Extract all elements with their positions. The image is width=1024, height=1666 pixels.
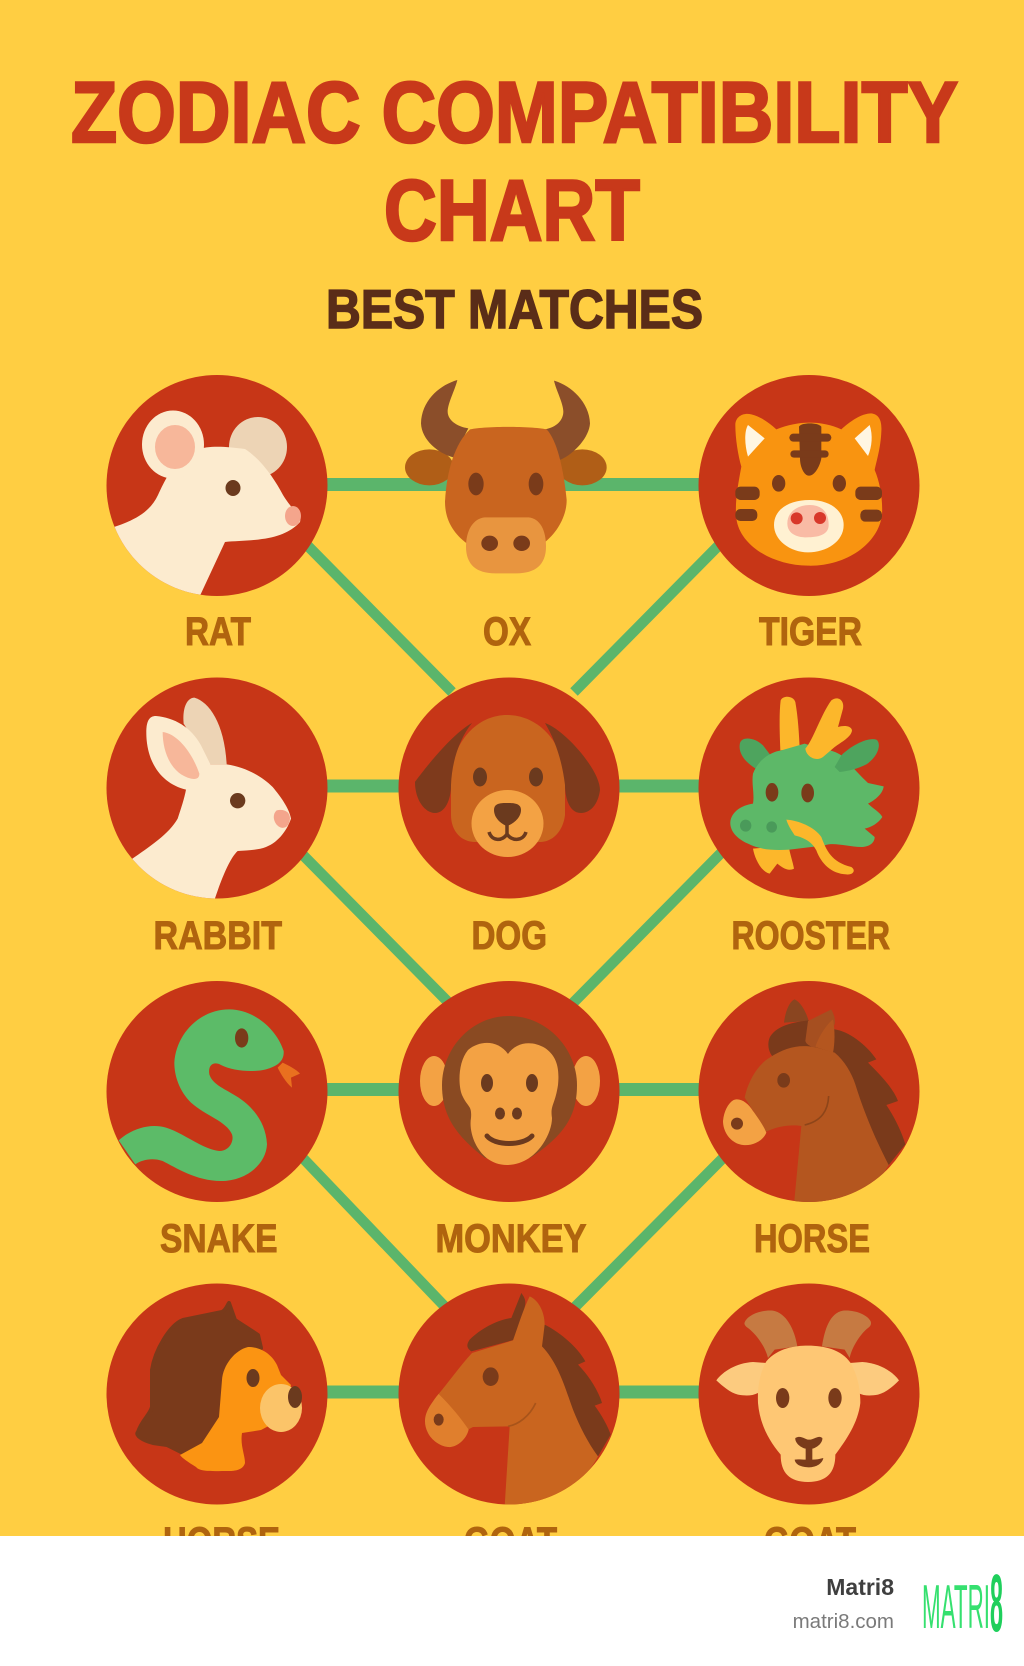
icon: rabbit [126, 698, 291, 900]
footer logo [922, 1558, 1003, 1649]
label: dog: DOG [472, 914, 547, 958]
icon: monkey [420, 1016, 600, 1165]
icon: maned animal [137, 1303, 302, 1471]
label: rat: RAT [185, 610, 251, 654]
label: ox: OX [483, 610, 531, 654]
panel: horse bottom left [106, 1284, 328, 1564]
icon: dog [415, 715, 600, 857]
icon: snake [119, 1009, 300, 1181]
footer brand name: Matri8 [826, 1574, 894, 1600]
icon: horse labelled goat [425, 1293, 611, 1506]
icon: ox [405, 380, 607, 573]
panel: goat right [698, 1284, 920, 1564]
label: monkey: MONKEY [436, 1217, 587, 1261]
label: goat clipped: GOAT [464, 1520, 557, 1564]
panel: goat centre [398, 1284, 620, 1564]
footer url: matri8.com [793, 1610, 894, 1633]
panel: rat [100, 375, 328, 654]
panel: rooster [698, 678, 920, 958]
icon: goat [716, 1311, 899, 1482]
panel: tiger [698, 375, 920, 654]
label: horse: HORSE [754, 1217, 870, 1261]
title [71, 65, 958, 259]
title: CHART [384, 163, 640, 259]
icon: tiger [735, 413, 882, 566]
panel: snake [106, 981, 328, 1261]
panel: rabbit [106, 678, 328, 958]
label: horse clipped: HORSE [163, 1520, 280, 1564]
connector lines [298, 484, 728, 1392]
label: rooster: ROOSTER [732, 914, 890, 958]
label: tiger: TIGER [759, 610, 862, 654]
footer band [0, 1536, 1024, 1666]
icon: horse [723, 999, 905, 1204]
panel: dog [398, 678, 620, 958]
label: rabbit: RABBIT [154, 914, 282, 958]
panel: horse [698, 981, 920, 1261]
panel: monkey [398, 981, 620, 1261]
subtitle: best matches: BEST MATCHES [326, 278, 703, 340]
label: goat clipped: GOAT [764, 1520, 856, 1564]
icon: dragon labelled rooster [730, 697, 884, 874]
label: snake: SNAKE [160, 1217, 278, 1261]
icon: rat [100, 410, 301, 600]
panel: ox [405, 380, 607, 654]
